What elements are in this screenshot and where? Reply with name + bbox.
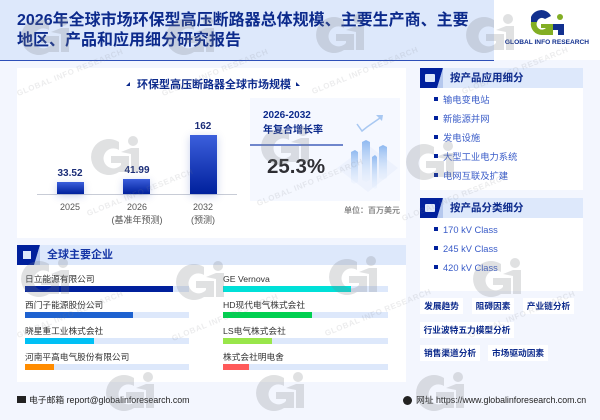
tag: 发展趋势 — [424, 301, 459, 311]
company 8: 株式会社明电舍 — [223, 352, 284, 362]
CAGR value: 25.3% — [267, 155, 325, 178]
company 3 — [25, 326, 189, 344]
value 2032: 162 — [195, 121, 211, 132]
value 2025: 33.52 — [57, 168, 83, 179]
icon: briefcase — [425, 204, 435, 212]
tag — [420, 322, 514, 338]
label 2026: (基准年预测) — [112, 215, 162, 225]
panel: by product type — [420, 198, 583, 291]
icon: envelope — [17, 396, 26, 402]
bar 2032 — [190, 135, 216, 194]
list item: 电网互联及扩建 — [443, 171, 508, 181]
bar chart — [37, 121, 237, 225]
company 2 — [25, 300, 189, 318]
company 1: 日立能源有限公司 — [25, 274, 94, 284]
company 5 — [223, 274, 388, 292]
list item: 420 kV Class — [443, 263, 498, 273]
header band — [0, 0, 494, 61]
company 8 — [223, 352, 388, 370]
CAGR label: 2026-2032 — [263, 110, 311, 121]
section heading — [17, 245, 406, 265]
logo: GLOBAL INFO RESEARCH — [505, 39, 589, 46]
CAGR label: 年复合增长率 — [263, 125, 323, 136]
tag — [523, 298, 574, 314]
heading text: 全球主要企业 — [47, 249, 113, 261]
value 2026: 41.99 — [124, 165, 150, 176]
icon: left title marker — [126, 82, 130, 86]
label 2025: 2025 — [60, 202, 80, 212]
panel: key companies — [17, 245, 406, 382]
bar 2025 — [57, 182, 84, 194]
icon: globe — [403, 396, 412, 404]
unit label: 单位：百万美元 — [344, 206, 400, 215]
CAGR label — [263, 110, 323, 136]
label 2032 — [191, 202, 215, 225]
icon: building — [23, 251, 31, 259]
company 4 — [25, 352, 189, 370]
company 6 — [223, 300, 388, 318]
label 2026: 2026 — [127, 202, 147, 212]
company 6: HD现代电气株式会社 — [223, 300, 305, 310]
list item: 新能源并网 — [443, 114, 490, 124]
icon: briefcase — [425, 74, 435, 82]
chart title: 环保型高压断路器全球市场规模 — [137, 79, 291, 91]
section heading — [420, 68, 583, 88]
company 7 — [223, 326, 388, 344]
list item: 245 kV Class — [443, 244, 498, 254]
tag: 行业波特五力模型分析 — [424, 325, 510, 335]
label 2026 — [112, 202, 162, 225]
heading text: 按产品应用细分 — [450, 72, 524, 84]
company 5: GE Vernova — [223, 274, 270, 284]
tag — [488, 345, 548, 361]
company 7: LS电气株式会社 — [223, 326, 286, 336]
panel: market size chart — [17, 68, 406, 238]
title — [17, 11, 469, 49]
tag — [472, 298, 514, 314]
bar 2026 — [123, 179, 150, 194]
label 2032: (预测) — [191, 215, 215, 225]
label 2032: 2032 — [193, 202, 213, 212]
tag: 市场驱动因素 — [492, 348, 544, 358]
panel: by application — [420, 68, 583, 190]
company 3: 晓星重工业株式会社 — [25, 326, 103, 336]
tag — [420, 298, 463, 314]
tag — [420, 345, 480, 361]
icon: right title marker — [296, 82, 300, 86]
tag: 销售渠道分析 — [424, 348, 476, 358]
section heading — [420, 198, 583, 218]
list item: 输电变电站 — [443, 95, 490, 105]
list item: 170 kV Class — [443, 225, 498, 235]
icon: rising bars illustration — [351, 115, 387, 188]
list item: 发电设施 — [443, 133, 480, 143]
title: 2026年全球市场环保型高压断路器总体规模、主要生产商、主要 — [17, 12, 469, 29]
company 1 — [25, 274, 189, 292]
footer: email: 电子邮箱 report@globalinforesearch.com — [29, 395, 190, 405]
panel: CAGR — [250, 98, 400, 201]
title: 地区、产品和应用细分研究报告 — [17, 32, 241, 49]
tag: 产业链分析 — [527, 301, 570, 311]
footer: website: 网址 https://www.globalinforesearch.com.cn — [416, 395, 586, 405]
company 4: 河南平高电气股份有限公司 — [25, 352, 129, 362]
logo — [494, 0, 600, 60]
company 2: 西门子能源股份公司 — [25, 300, 103, 310]
tag: 阻碍因素 — [476, 301, 510, 311]
list item: 大型工业电力系统 — [443, 152, 517, 162]
heading text: 按产品分类细分 — [450, 202, 524, 214]
